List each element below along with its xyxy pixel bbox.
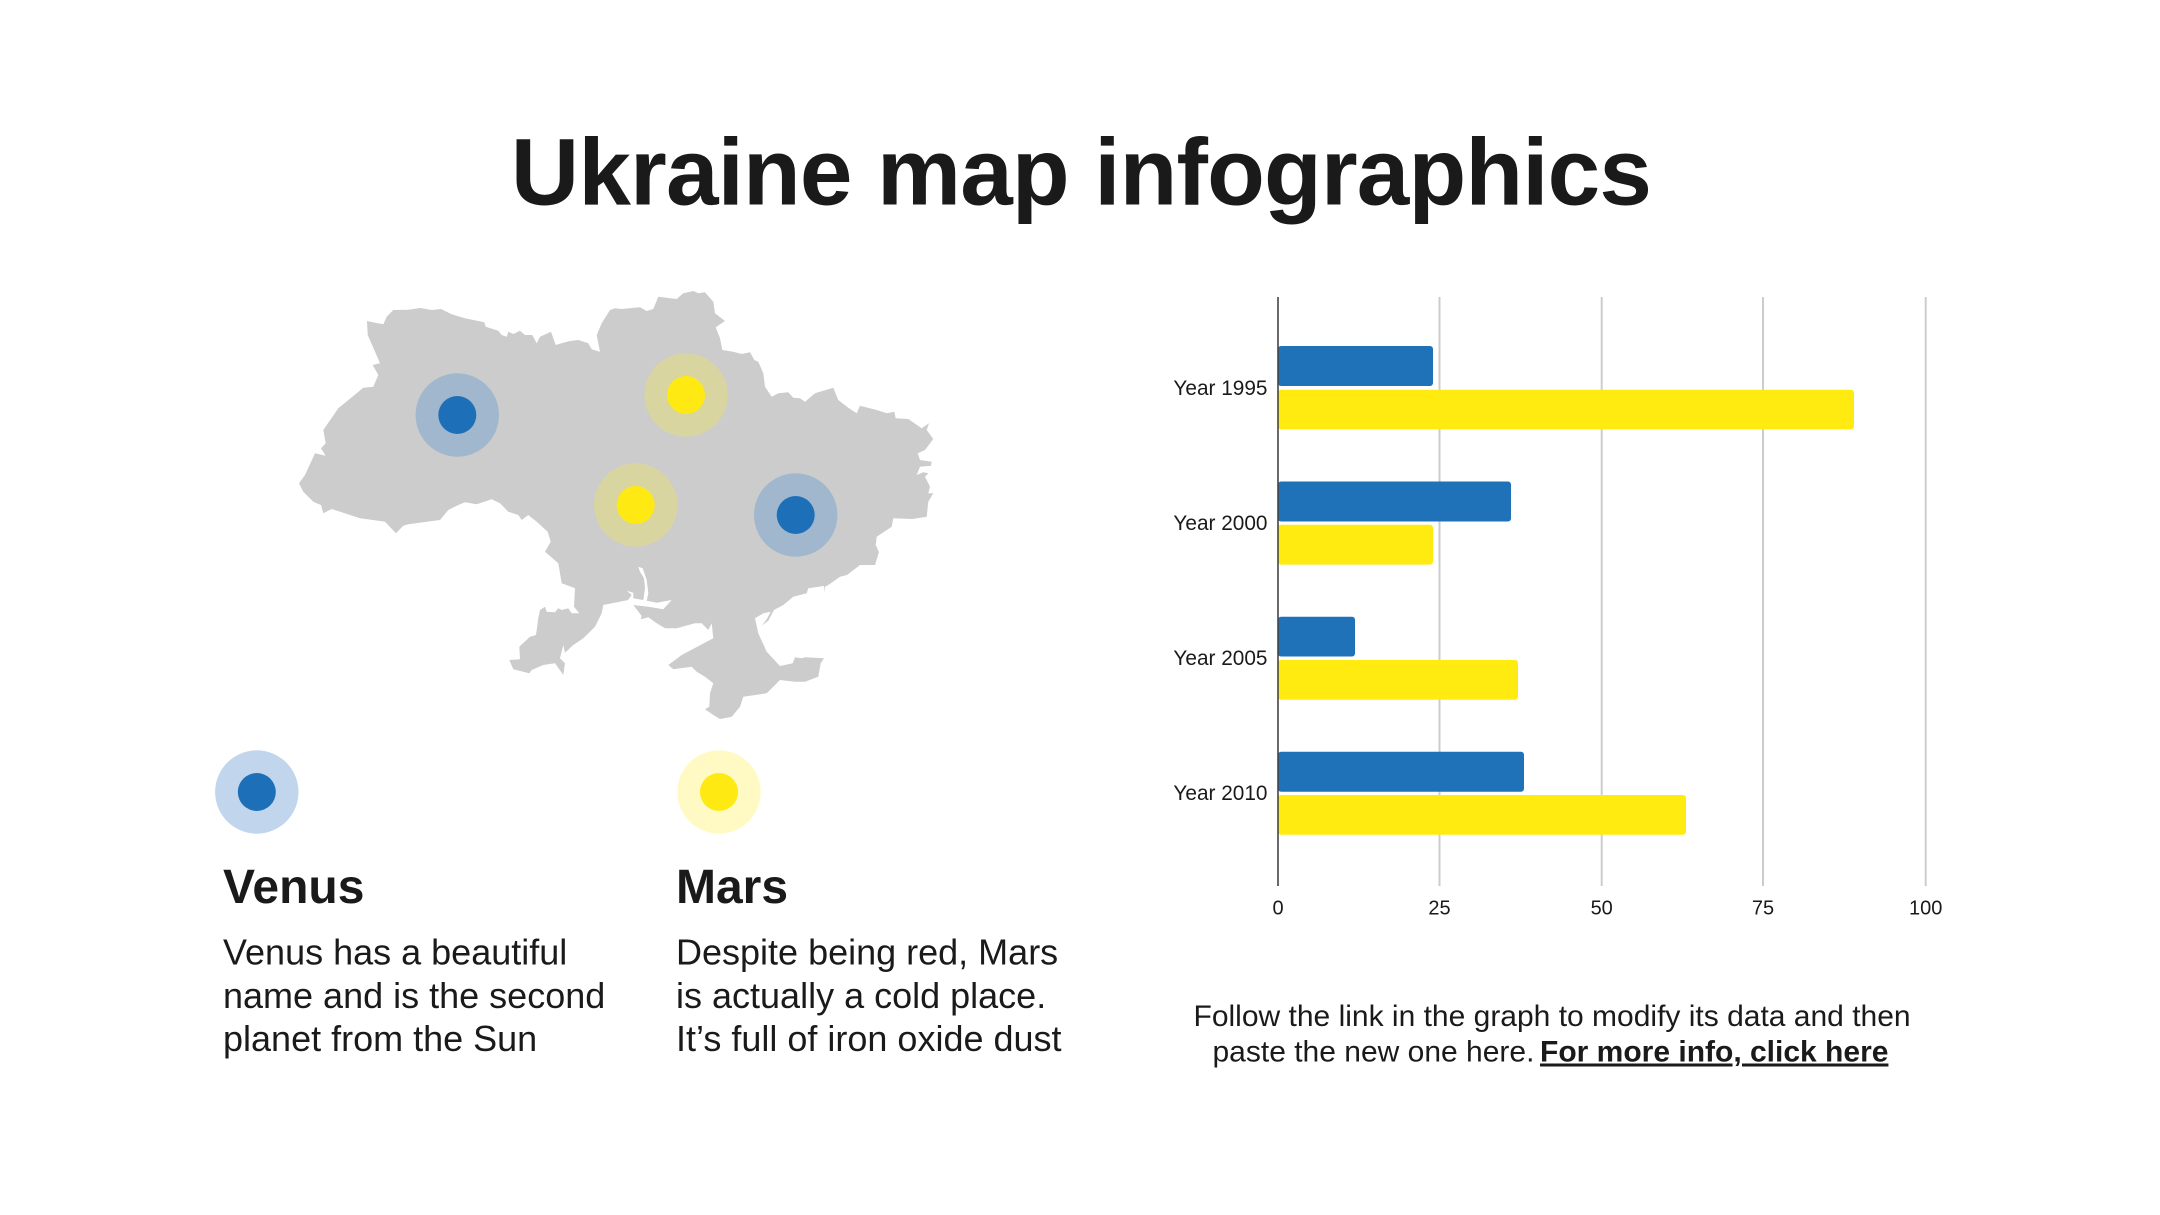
text: chart note with link: paste the new one here. bbox=[1212, 1036, 1543, 1068]
text: Mars description: It’s full of iron oxide dust bbox=[676, 1018, 1062, 1059]
icon: Mars yellow dot bbox=[677, 750, 761, 834]
marker: yellow centre bbox=[594, 463, 677, 547]
text: Venus description: planet from the Sun bbox=[223, 1018, 537, 1059]
value axis labels: 0 bbox=[1272, 897, 1284, 919]
bars: Year 2005 bbox=[1278, 617, 1518, 700]
marker: blue east bbox=[754, 473, 837, 557]
marker: blue west bbox=[416, 373, 499, 457]
category labels: Year 2005 bbox=[1173, 647, 1268, 670]
category labels: Year 2010 bbox=[1173, 782, 1268, 805]
axis line bbox=[1277, 297, 1279, 886]
icon: Venus blue dot bbox=[215, 750, 298, 834]
text: chart note with link: For more info, click here bbox=[1540, 1036, 1888, 1068]
panel: Venus legend bbox=[215, 750, 605, 1059]
map: Ukraine silhouette bbox=[299, 291, 933, 719]
value axis labels bbox=[1272, 897, 1942, 919]
bar chart bbox=[1173, 297, 1942, 919]
category labels bbox=[1173, 377, 1268, 805]
title: Ukraine map infographics bbox=[511, 120, 1651, 226]
value axis labels: 75 bbox=[1752, 897, 1774, 919]
heading: Venus: Venus bbox=[223, 861, 364, 914]
text: chart note with link: Follow the link in the graph to modify its data and then bbox=[1194, 1000, 1911, 1033]
panel: Mars legend bbox=[676, 750, 1062, 1059]
text: Venus description: Venus has a beautiful bbox=[223, 932, 567, 972]
marker: yellow north bbox=[644, 353, 728, 437]
bars: Year 2000 bbox=[1278, 482, 1511, 565]
value axis labels: 25 bbox=[1428, 897, 1451, 919]
bars: Year 2010 bbox=[1278, 752, 1686, 835]
value axis labels: 50 bbox=[1591, 897, 1613, 919]
map panel: Ukraine with markers bbox=[299, 291, 933, 719]
text: Mars description: is actually a cold place. bbox=[676, 975, 1046, 1016]
bars: Year 1995 bbox=[1278, 346, 1854, 429]
heading: Mars: Mars bbox=[676, 861, 788, 914]
text: Venus description: name and is the second bbox=[223, 975, 605, 1016]
value axis labels: 100 bbox=[1909, 897, 1942, 919]
text: Mars description: Despite being red, Mars bbox=[676, 932, 1058, 972]
category labels: Year 1995 bbox=[1173, 377, 1268, 400]
category labels: Year 2000 bbox=[1173, 512, 1268, 535]
